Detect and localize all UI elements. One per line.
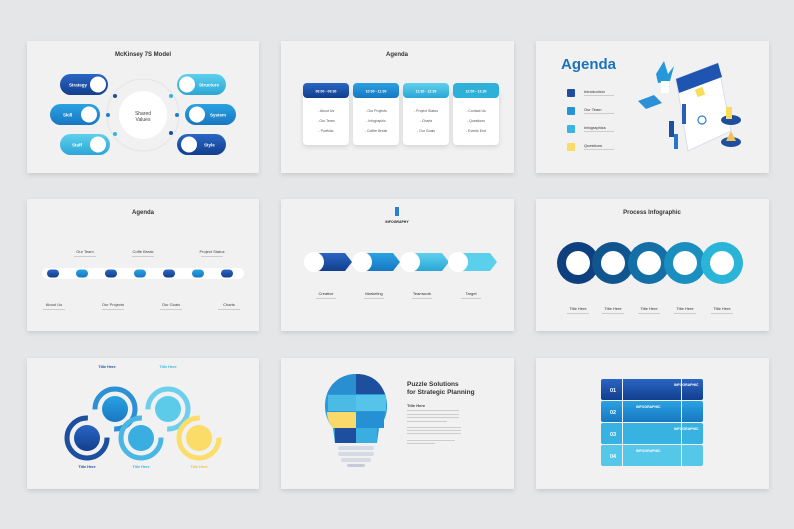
row 03: INFOGRAPHIC (674, 427, 699, 431)
text block: for Strategic Planning (407, 389, 475, 396)
agenda list: Infographics (584, 125, 606, 130)
labels top: Our Team (76, 249, 94, 254)
card 2: - Our Projects (365, 109, 387, 113)
card 1 (303, 83, 349, 145)
timeline bar (42, 268, 244, 279)
labels: Marketing (365, 291, 383, 296)
row 04 (601, 445, 703, 466)
card 4: - Events End (466, 129, 486, 133)
slide: puzzle rows (536, 358, 769, 489)
labels: Target (465, 291, 477, 296)
agenda list: Questions (584, 143, 602, 148)
logo: INFOGRAPHY (385, 220, 409, 224)
row 02: INFOGRAPHIC (636, 405, 661, 409)
center circle: Shared Values (107, 79, 179, 151)
arrow items (304, 252, 497, 272)
labels: Teamwork (413, 291, 431, 296)
labels bottom: About Us (46, 302, 62, 307)
card 4: - Questions (467, 119, 485, 123)
slide: Process Infographic (536, 199, 769, 331)
pill: Skill (50, 104, 110, 125)
logo (385, 207, 409, 224)
slide: McKinsey 7S Model (27, 41, 259, 173)
slide: arrow process (281, 199, 514, 331)
card 4 (453, 83, 499, 145)
card 2: - Coffee Break (365, 129, 387, 133)
title: Process Infographic (623, 210, 682, 216)
title: Agenda (386, 52, 409, 58)
labels: Title Here (604, 306, 622, 311)
card 3: - Our Goals (417, 129, 435, 133)
card 3: - Charts (420, 119, 432, 123)
row 03 (601, 423, 703, 444)
pill: Style: Style (204, 142, 215, 148)
labels bottom: Our Goals (162, 302, 180, 307)
card 1: - Portfolio (319, 129, 334, 133)
card 2 (353, 83, 399, 145)
row 02: 02 (610, 410, 616, 416)
labels: Title Here (98, 365, 116, 369)
rings (557, 242, 743, 284)
labels: Title Here (713, 306, 731, 311)
center circle: Shared Values: Values (136, 117, 151, 123)
card 2: 10:00 - 11:30 (366, 90, 386, 94)
agenda list: Introduction (584, 89, 605, 94)
center circle: Shared Values: Shared (135, 111, 151, 117)
title: Agenda (132, 210, 155, 216)
labels: Title Here (159, 365, 177, 369)
text block (407, 381, 475, 444)
labels: Title Here (190, 465, 208, 469)
labels (567, 306, 733, 314)
card 3 (403, 83, 449, 145)
labels: Title Here (78, 465, 96, 469)
labels top (74, 249, 224, 257)
pill: Strategy (60, 74, 117, 98)
slide: Agenda timeline (27, 199, 259, 331)
agenda list: Our Team (584, 107, 602, 112)
labels (78, 365, 208, 469)
card 3: - Project Status (414, 109, 438, 113)
row 02 (601, 401, 703, 422)
row 01: INFOGRAPHIC (674, 383, 699, 387)
card 4: 12:00 - 13:30 (465, 90, 487, 94)
labels (316, 291, 481, 299)
slide: Agenda illustration (536, 41, 769, 173)
labels top: Project Status (200, 249, 224, 254)
circles (67, 389, 219, 458)
labels: Title Here (569, 306, 587, 311)
labels: Creative (319, 291, 334, 296)
pill: Structure: Structure (199, 82, 220, 88)
row 03: 03 (610, 432, 616, 438)
pill: Staff: Staff (72, 142, 83, 148)
card 1: - Our Team (317, 119, 335, 123)
pill: Style (169, 131, 226, 155)
labels bottom: Charts (223, 302, 235, 307)
card 4: - Contact Us (466, 109, 486, 113)
labels bottom: Our Projects (102, 302, 124, 307)
text block: Puzzle Solutions (407, 381, 459, 388)
labels top: Coffe Break (132, 249, 154, 254)
row 01 (601, 379, 703, 400)
text block: Title Here (407, 403, 426, 408)
slide: wave circles (27, 358, 259, 489)
pill: Staff (60, 132, 117, 155)
row 04: 04 (610, 454, 617, 460)
labels: Title Here (640, 306, 658, 311)
row 01: 01 (610, 388, 616, 394)
illustration: calendar (638, 61, 741, 151)
card 1: - About Us (318, 109, 334, 113)
slide: Agenda cards (281, 41, 514, 173)
card 3: 11:30 - 12:30 (416, 90, 436, 94)
card 1: 09:00 - 09:30 (315, 90, 337, 94)
pill: System (175, 104, 236, 125)
title: McKinsey 7S Model (115, 52, 171, 58)
pill: Skill: Skill (63, 112, 72, 118)
slide: Puzzle lightbulb (281, 358, 514, 489)
labels: Title Here (676, 306, 694, 311)
agenda list (567, 89, 614, 151)
lightbulb puzzle (325, 374, 387, 467)
pill: Strategy: Strategy (69, 82, 88, 88)
title: Agenda (561, 56, 617, 73)
card 2: - Infographic (366, 119, 386, 123)
labels: Title Here (132, 465, 150, 469)
pill: System: System (210, 112, 226, 118)
labels bottom (43, 302, 240, 310)
row 04: INFOGRAPHIC (636, 449, 661, 453)
pill: Structure (169, 74, 226, 98)
